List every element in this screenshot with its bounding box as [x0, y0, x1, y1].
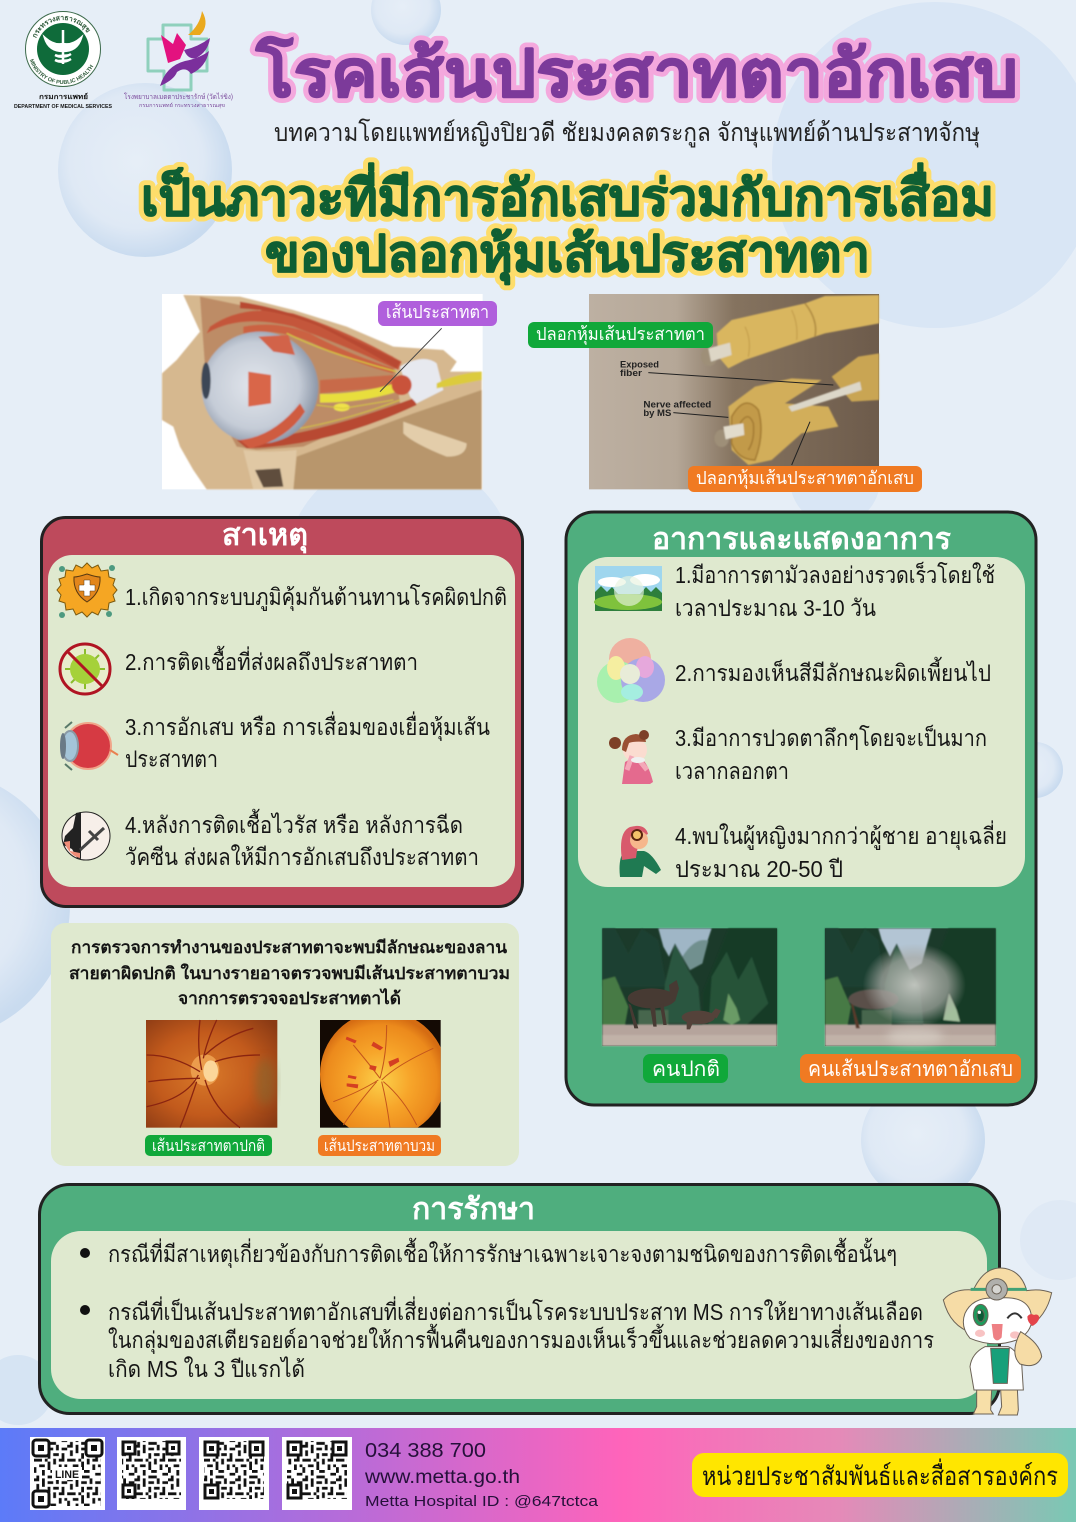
QR code: LINE: LINE — [55, 1469, 79, 1481]
heading: symptoms: อาการและแสดงอาการ — [652, 523, 951, 556]
QR code: LINE — [30, 1437, 105, 1510]
text: treatment 2: เกิด MS ใน 3 ปีแรกได้ — [108, 1356, 305, 1382]
photo: optic neuritis vision — [825, 928, 996, 1046]
image: myelin sheath: by MS — [643, 408, 671, 418]
icon: woman with magnifier — [620, 826, 661, 877]
text: symptom 4 — [675, 820, 1007, 882]
icon: vaccine injection — [62, 812, 110, 860]
text: cause 1: 1.เกิดจากระบบภูมิคุ้มกันต้านทานโรคผิดปกติ — [125, 584, 507, 611]
text: treatment 2: ในกลุ่มของสเตียรอยด์อาจช่วยให้การฟื้นคืนของการมองเห็นเร็วขึ้นและช่วยลดความเสี่ยงของการ — [108, 1324, 934, 1354]
image: myelin sheath: Exposed — [620, 359, 659, 369]
heading: treatment: การรักษา — [412, 1193, 535, 1226]
label: myelin sheath: ปลอกหุ้มเส้นประสาทตา — [536, 324, 705, 345]
logo: Metta hospital — [124, 11, 233, 109]
image: myelin sheath — [589, 294, 879, 489]
text: treatment 2 — [80, 1296, 934, 1382]
panel: treatment — [40, 1184, 1000, 1414]
text: examination — [69, 937, 510, 1008]
subtitle: author: บทความโดยแพทย์หญิงปิยวดี ชัยมงคลตระกูล จักษุแพทย์ด้านประสาทจักษุ — [274, 118, 980, 148]
text: cause 3 — [125, 711, 490, 772]
headline: ของปลอกหุ้มเส้นประสาทตา — [265, 226, 870, 285]
contact details: Metta Hospital ID : @647tctca — [365, 1493, 599, 1510]
label: normal: คนปกติ — [652, 1058, 720, 1081]
icon: inflamed eye — [60, 722, 118, 770]
text: symptom 1: เวลาประมาณ 3-10 วัน — [675, 595, 876, 621]
headline: เป็นภาวะที่มีการอักเสบร่วมกับการเสื่อม — [141, 163, 994, 226]
text: symptom 3 — [675, 723, 987, 784]
text: cause 4: 4.หลังการติดเชื้อไวรัส หรือ หลังการฉีด — [125, 809, 463, 838]
logo: department of medical services: MINISTRY OF PUBLIC HEALTH — [30, 58, 94, 84]
icon: no virus — [60, 644, 110, 694]
icon: colour circles — [597, 638, 665, 703]
text: cause 4: วัคซีน ส่งผลให้มีการอักเสบถึงประสาทตา — [125, 844, 479, 870]
contact details: www.metta.go.th — [364, 1467, 520, 1488]
label: optic neuritis patient: คนเส้นประสาทตาอักเสบ — [808, 1058, 1013, 1081]
headline — [141, 163, 994, 285]
text: examination: สายตาผิดปกติ ในบางรายอาจตรวจพบมีเส้นประสาทตาบวม — [69, 963, 510, 983]
icon: immune shield — [57, 563, 117, 618]
text: symptom 1 — [675, 560, 995, 621]
label: swollen optic nerve: เส้นประสาทตาบวม — [324, 1137, 435, 1155]
text: symptom 1: 1.มีอาการตามัวลงอย่างรวดเร็วโดยใช้ — [675, 560, 995, 588]
headline: เป็นภาวะที่มีการอักเสบร่วมกับการเสื่อม — [141, 163, 994, 226]
title: โรคเส้นประสาทตาอักเสบ — [255, 35, 1018, 110]
department badge — [692, 1453, 1068, 1497]
text: symptom 2: 2.การมองเห็นสีมีลักษณะผิดเพี้ยนไป — [675, 657, 991, 686]
QR code 2 — [117, 1437, 186, 1510]
headline: ของปลอกหุ้มเส้นประสาทตา — [265, 226, 870, 285]
logo: department of medical services — [14, 11, 112, 110]
logo: department of medical services: กระทรวงสาธารณสุข — [33, 16, 90, 38]
QR code 4 — [282, 1437, 352, 1510]
logo: Metta hospital: โรงพยาบาลเมตตาประชารักษ์ (วัดไร่ขิง) — [124, 92, 233, 101]
photo: normal vision — [602, 928, 777, 1046]
footer band — [0, 1428, 1076, 1522]
panel: examination — [51, 923, 519, 1166]
logo: department of medical services: กรมการแพทย์ — [39, 92, 88, 101]
panel: causes — [42, 518, 522, 906]
image: eye anatomy — [162, 294, 483, 489]
mascot — [943, 1268, 1052, 1415]
title: โรคเส้นประสาทตาอักเสบ — [255, 35, 1018, 110]
image: myelin sheath: Nerve affected — [643, 399, 711, 409]
contact details: 034 388 700 — [365, 1440, 486, 1462]
icon: girl rubbing eyes — [609, 730, 653, 784]
text: treatment 2: กรณีที่เป็นเส้นประสาทตาอักเสบที่เสี่ยงต่อการเป็นโรคระบบประสาท MS การให้ยาทางเส้นเลือด — [108, 1296, 923, 1325]
label: normal — [643, 1054, 728, 1083]
text: examination: จากการตรวจจอประสาทตาได้ — [178, 988, 401, 1008]
text: symptom 4: ประมาณ 20-50 ปี — [675, 856, 843, 882]
text: symptom 3: เวลากลอกตา — [675, 758, 789, 784]
text: cause 3: 3.การอักเสบ หรือ การเสื่อมของเยื่อหุ้มเส้น — [125, 711, 490, 741]
photo: swollen fundus — [320, 1020, 441, 1128]
QR code 3 — [199, 1437, 269, 1510]
image: myelin sheath: fiber — [620, 368, 643, 378]
logo: Metta hospital: กรมการแพทย์ กระทรวงสาธารณสุข — [139, 102, 225, 109]
heading: causes: สาเหตุ — [222, 519, 308, 554]
logo: department of medical services: DEPARTMENT OF MEDICAL SERVICES — [14, 104, 112, 110]
label: normal optic nerve: เส้นประสาทตาปกติ — [152, 1137, 265, 1155]
label: inflamed myelin sheath: ปลอกหุ้มเส้นประสาทตาอักเสบ — [696, 468, 914, 489]
text: cause 3: ประสาทตา — [125, 746, 218, 772]
photo: normal fundus — [146, 1020, 277, 1128]
text: treatment 1: กรณีที่มีสาเหตุเกี่ยวข้องกับการติดเชื้อให้การรักษาเฉพาะเจาะจงตามชนิดของการติดเชื้อนั้นๆ — [108, 1238, 897, 1268]
icon: blurred landscape — [594, 566, 662, 611]
text: symptom 4: 4.พบในผู้หญิงมากกว่าผู้ชาย อายุเฉลี่ย — [675, 820, 1007, 850]
text: cause 4 — [125, 809, 479, 870]
text: examination: การตรวจการทำงานของประสาทตาจะพบมีลักษณะของลาน — [71, 937, 507, 957]
text: symptom 3: 3.มีอาการปวดตาลึกๆโดยจะเป็นมาก — [675, 723, 987, 751]
text: cause 2: 2.การติดเชื้อที่ส่งผลถึงประสาทตา — [125, 646, 418, 675]
contact details — [364, 1440, 599, 1510]
label: optic nerve: เส้นประสาทตา — [386, 302, 489, 322]
panel: symptoms — [566, 512, 1036, 1105]
